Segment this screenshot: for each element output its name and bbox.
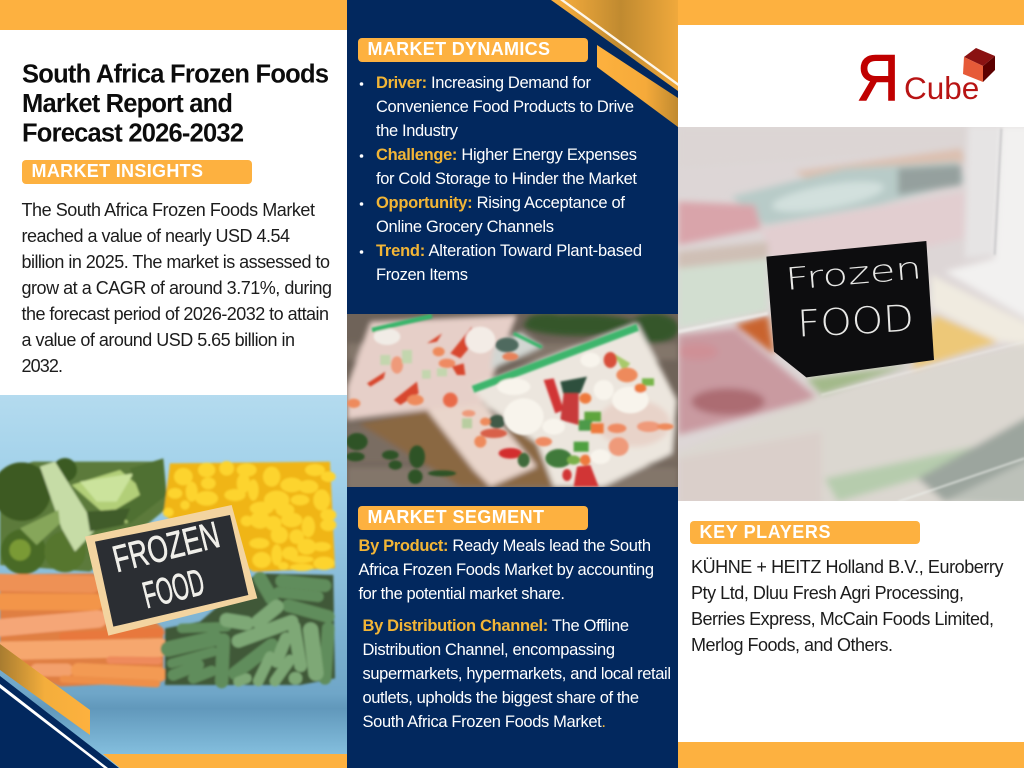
chalkboard sign: FROZEN — [108, 513, 224, 580]
decorative gold ribbons: top of centre column — [551, 0, 678, 127]
heading: key players: KEY PLAYERS — [700, 522, 830, 542]
chalkboard sign — [85, 505, 257, 636]
icon: red cube — [963, 48, 995, 82]
text block: by distribution channel: supermarkets, hypermarkets, and local retail — [362, 665, 671, 683]
driver: the Industry — [376, 122, 459, 140]
heading: market segment: MARKET SEGMENT — [368, 507, 544, 527]
text block: key players: KÜHNE + HEITZ Holland B.V., Euroberry — [691, 557, 1004, 577]
challenge: Challenge: Higher Energy Expenses — [376, 146, 637, 164]
trend: Trend: Alteration Toward Plant-based — [376, 242, 642, 260]
text block: market insights — [22, 200, 332, 376]
text block: key players: Pty Ltd, Dluu Fresh Agri Processing, — [691, 583, 964, 603]
driver — [360, 74, 634, 140]
opportunity — [360, 194, 625, 236]
herbs top right — [524, 313, 679, 343]
text block: market insights: a value of around USD 5.65 billion in — [22, 330, 295, 350]
text block: by product — [358, 537, 654, 603]
left bag details — [347, 327, 495, 408]
text block: by distribution channel: South Africa Frozen Foods Market. — [362, 713, 606, 731]
bottom orange bar: right — [678, 742, 1024, 768]
driver: Driver: Increasing Demand for — [376, 74, 592, 92]
back bag details — [495, 338, 519, 352]
lower bag details — [462, 410, 530, 467]
back bag base — [490, 332, 542, 370]
text block: market insights: reached a value of nearly USD 4.54 — [22, 226, 290, 246]
opportunity: Online Grocery Channels — [376, 218, 554, 236]
trend: Frozen Items — [376, 266, 468, 284]
pink band — [678, 202, 761, 245]
photo: frozen vegetables tray — [0, 395, 347, 768]
logo: RCube: Я — [857, 41, 899, 114]
chalkboard sign: FOOD — [138, 560, 208, 616]
frozen teal pack — [731, 162, 965, 225]
heading: market dynamics: MARKET DYNAMICS — [368, 39, 550, 59]
top orange bar: right — [678, 0, 1024, 25]
heading: key players — [690, 521, 920, 544]
icon: carrots — [0, 573, 163, 687]
text block: by distribution channel: outlets, upholds the biggest share of the — [362, 689, 639, 707]
photo: frozen food drawer — [678, 125, 1024, 505]
title: Forecast 2026-2032 — [22, 120, 244, 148]
peas under sign — [806, 365, 911, 395]
text block: by distribution channel: Distribution Channel, encompassing — [362, 641, 615, 659]
icon: green beans — [165, 573, 335, 685]
title: South Africa Frozen Foods — [22, 60, 329, 88]
challenge: for Cold Storage to Hinder the Market — [376, 170, 637, 188]
top orange bar: left — [0, 0, 347, 30]
top drawer frame — [965, 125, 1001, 258]
challenge — [360, 146, 637, 188]
heading: market insights: MARKET INSIGHTS — [32, 161, 203, 181]
frozen meat — [678, 328, 818, 435]
text block: market dynamics — [360, 74, 642, 284]
text block: by distribution channel: By Distribution Channel: The Offline — [362, 617, 629, 635]
icon: broccoli — [0, 458, 167, 574]
heading: market insights — [22, 160, 252, 184]
photo: frozen vegetables in zip bags — [346, 313, 679, 490]
left bag base — [347, 315, 517, 420]
title: Market Report and — [22, 90, 233, 118]
text block: by distribution channel — [362, 617, 671, 731]
decorative navy corner: bottom left — [0, 676, 119, 768]
text block: by product: for the potential market share. — [358, 585, 565, 603]
decorative gold ribbon: bottom left — [0, 644, 90, 735]
chalkboard note: FOOD — [796, 297, 915, 346]
burlap cloth — [359, 410, 560, 487]
left lower pack — [678, 242, 768, 268]
right wall — [945, 125, 1024, 322]
corn tray — [931, 275, 1024, 345]
chalkboard note — [766, 241, 934, 377]
right bag details — [473, 327, 638, 389]
text block: market insights: the forecast period of 2026-2032 to attain — [22, 304, 329, 324]
text block: market insights: The South Africa Frozen Foods Market — [22, 200, 315, 220]
logo: RCube — [857, 41, 995, 114]
right bag base — [472, 323, 677, 487]
text block: key players: Berries Express, McCain Foods Limited, — [691, 609, 994, 629]
title — [22, 60, 329, 148]
text block: market insights: billion in 2025. The market is assessed to — [22, 252, 330, 272]
driver: Convenience Food Products to Drive — [376, 98, 634, 116]
text block: market insights: grow at a CAGR of around 3.71%, during — [22, 278, 332, 298]
trend — [360, 242, 642, 284]
text block: market insights: 2032. — [22, 356, 63, 376]
lower bag base — [427, 403, 537, 487]
text block: by product: Africa Frozen Foods Market by accounting — [358, 561, 654, 579]
heading: market dynamics — [358, 38, 588, 62]
heading: market segment — [358, 506, 588, 530]
logo: RCube: Cube — [904, 70, 979, 106]
panel: navy centre column — [347, 0, 678, 768]
text block: by product: By Product: Ready Meals lead the South — [358, 537, 651, 555]
text block: key players: Merlog Foods, and Others. — [691, 635, 893, 655]
text block: key players — [691, 557, 1004, 655]
chalkboard note: Frozen — [784, 251, 923, 298]
bottom orange bar: left — [103, 754, 347, 768]
icon: corn — [163, 461, 336, 572]
opportunity: Opportunity: Rising Acceptance of — [376, 194, 625, 212]
herbs bottom left — [346, 433, 456, 484]
peas in front — [825, 447, 970, 501]
front drawer — [807, 396, 816, 402]
carrots behind sign — [735, 315, 775, 355]
